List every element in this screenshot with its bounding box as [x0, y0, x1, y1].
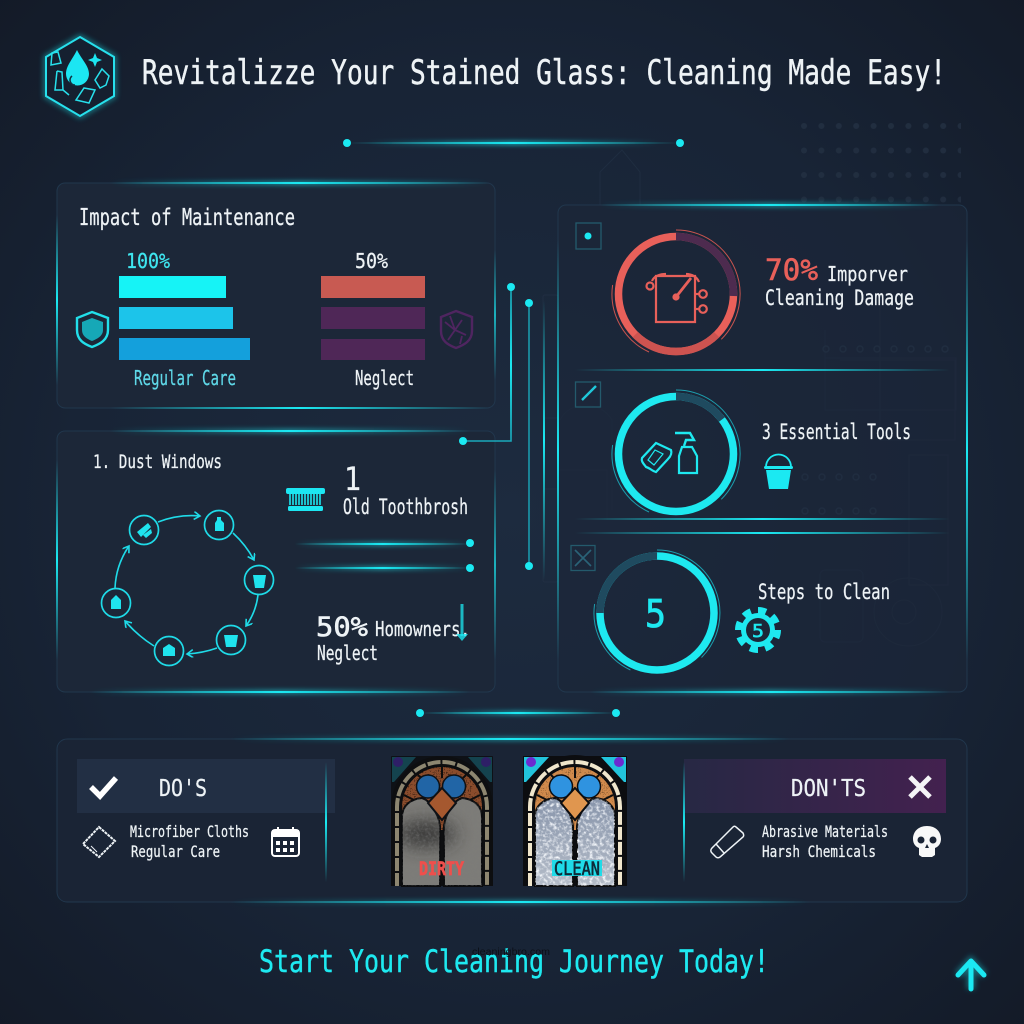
icon: check mark	[91, 778, 116, 796]
bar chart: neglect: 50%	[355, 249, 388, 273]
do's list: Regular Care	[131, 842, 220, 861]
panel: key statistics	[557, 203, 968, 694]
small marker boxes	[571, 223, 601, 570]
stat: seventy percent improper cleaning damage: Cleaning Damage	[765, 286, 914, 310]
stained glass window: dirty	[391, 756, 493, 886]
icon: numbered gear	[739, 611, 777, 649]
panel heading: 1. Dust Windows	[93, 451, 222, 473]
do's list	[130, 822, 249, 861]
donut chart: five steps	[594, 550, 720, 670]
icon: bucket	[764, 454, 793, 489]
icon: microfiber cloth	[83, 827, 115, 857]
stained glass window: clean	[523, 755, 627, 886]
donut chart: three tools	[612, 390, 740, 512]
icon: calendar	[272, 827, 299, 856]
don'ts list: Abrasive Materials	[762, 822, 888, 841]
bar chart: neglect: Neglect	[355, 366, 414, 390]
stat: seventy percent improper cleaning damage: 70%	[765, 253, 818, 287]
donut chart: seventy percent	[595, 213, 757, 375]
do's heading: DO'S	[159, 776, 207, 802]
bar chart: regular care: Regular Care	[134, 366, 236, 390]
stat: three essential tools: 3 Essential Tools	[762, 420, 911, 444]
icon: intact shield	[77, 312, 108, 347]
connector lines with dots	[295, 539, 474, 572]
connectors between panels	[459, 283, 545, 580]
dirty label: DIRTY	[419, 858, 464, 880]
cycle diagram: six cleaning steps	[102, 510, 274, 666]
icon: cross mark	[910, 777, 930, 797]
top divider with end dots	[343, 139, 684, 147]
don'ts column	[683, 759, 946, 882]
icon: abrasive eraser	[711, 826, 744, 858]
icon: up arrow	[958, 961, 984, 989]
stat: one old toothbrush: Old Toothbrosh	[343, 495, 468, 519]
stat: steps to clean: Steps to Clean	[758, 580, 890, 604]
icon: numbered gear: 5	[752, 621, 764, 642]
stat: fifty percent homeowners neglect: 50%	[316, 612, 368, 643]
stat: fifty percent homeowners neglect	[316, 612, 470, 665]
bar chart: neglect	[321, 249, 425, 390]
bar chart: regular care: 100%	[126, 249, 170, 273]
stat: seventy percent improper cleaning damage: Imporver	[827, 262, 908, 286]
stat: fifty percent homeowners neglect: Neglect	[317, 641, 378, 665]
panel: impact of maintenance	[56, 181, 496, 409]
logo icon: hexagon with water drop and glass shards	[46, 37, 114, 116]
don'ts heading: DON'TS	[791, 776, 866, 802]
icon: damaged cloth with gauge	[646, 274, 707, 322]
middle divider with end dots	[416, 709, 620, 717]
call to action: Start Your Cleaning Journey Today!	[259, 944, 769, 980]
stat: seventy percent improper cleaning damage	[765, 253, 914, 310]
icon: skull	[913, 826, 941, 857]
do's list: Microfiber Cloths	[130, 822, 249, 841]
icon: down arrow	[456, 604, 468, 641]
stat: fifty percent homeowners neglect: Homowners.	[375, 617, 470, 641]
do's column	[77, 759, 335, 882]
icon: cloth and spray bottle	[642, 433, 697, 473]
panel heading: Impact of Maintenance	[79, 205, 295, 231]
bar chart: regular care	[119, 249, 250, 390]
icon: cracked shield	[441, 311, 472, 348]
panel: dust windows process	[56, 429, 496, 694]
source url: cleaningbro.com	[472, 947, 550, 958]
background decoration: dot grid and faint line art	[543, 123, 961, 646]
donut chart: five steps: 5	[645, 592, 666, 636]
panel: do's, don'ts and window comparison	[57, 737, 967, 904]
icon: toothbrush	[286, 488, 325, 511]
stat: one old toothbrush	[343, 460, 468, 519]
stat: one old toothbrush: 1	[344, 460, 361, 498]
don'ts list: Harsh Chemicals	[762, 842, 876, 861]
clean label: CLEAN	[554, 858, 600, 880]
don'ts list	[762, 822, 888, 861]
